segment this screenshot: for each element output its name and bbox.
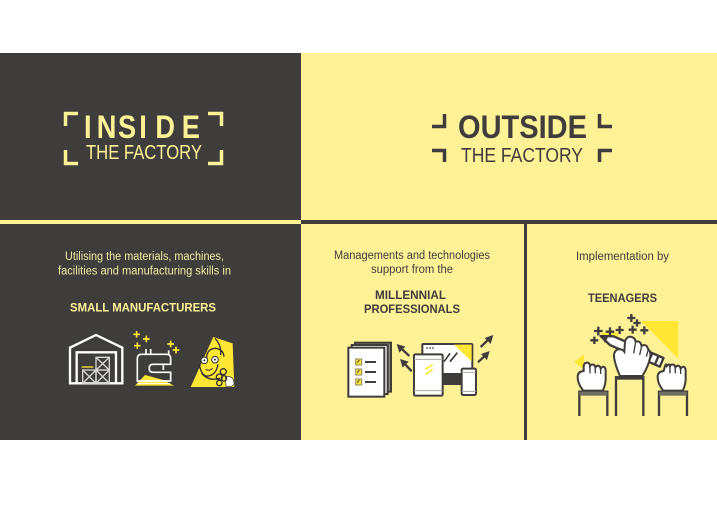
heading: inside the factory: THE FACTORY — [86, 142, 202, 164]
text: inside description — [58, 251, 231, 278]
hand: left — [578, 363, 606, 391]
heading: outside the factory: OUTSIDE — [458, 109, 587, 145]
plus signs — [590, 314, 648, 344]
icon: documents checklist — [348, 343, 391, 397]
text: management description: support from the — [371, 264, 453, 276]
panel: inside background — [0, 53, 301, 440]
icon: raised hands with pencil — [574, 314, 687, 416]
heading: outside the factory — [432, 109, 612, 167]
heading: inside the factory: INSIDE — [84, 110, 200, 146]
icon: woman crafting — [191, 337, 234, 387]
heading: teenagers: TEENAGERS — [588, 291, 657, 305]
heading: inside the factory — [66, 110, 222, 164]
panel: outside background — [301, 53, 717, 440]
heading: millennial professionals — [364, 288, 460, 316]
hand: centre — [614, 337, 650, 376]
heading: millennial professionals: PROFESSIONALS — [364, 302, 460, 316]
text: implementation by: Implementation by — [576, 251, 669, 263]
text: management description — [334, 250, 490, 276]
icon: devices — [414, 344, 476, 396]
text: management description: Managements and technologies — [334, 250, 490, 262]
hand: right — [658, 364, 686, 391]
heading: outside the factory: THE FACTORY — [461, 145, 583, 167]
heading: small manufacturers: SMALL MANUFACTURERS — [70, 300, 216, 314]
heading: millennial professionals: MILLENNIAL — [375, 288, 446, 302]
text: inside description: Utilising the materials, machines, — [65, 251, 224, 263]
text: inside description: facilities and manufacturing skills in — [58, 266, 231, 278]
icon: sewing machine — [133, 331, 179, 386]
pencil — [601, 336, 663, 367]
icon: arrows — [397, 335, 493, 371]
icon: factory — [70, 335, 122, 383]
